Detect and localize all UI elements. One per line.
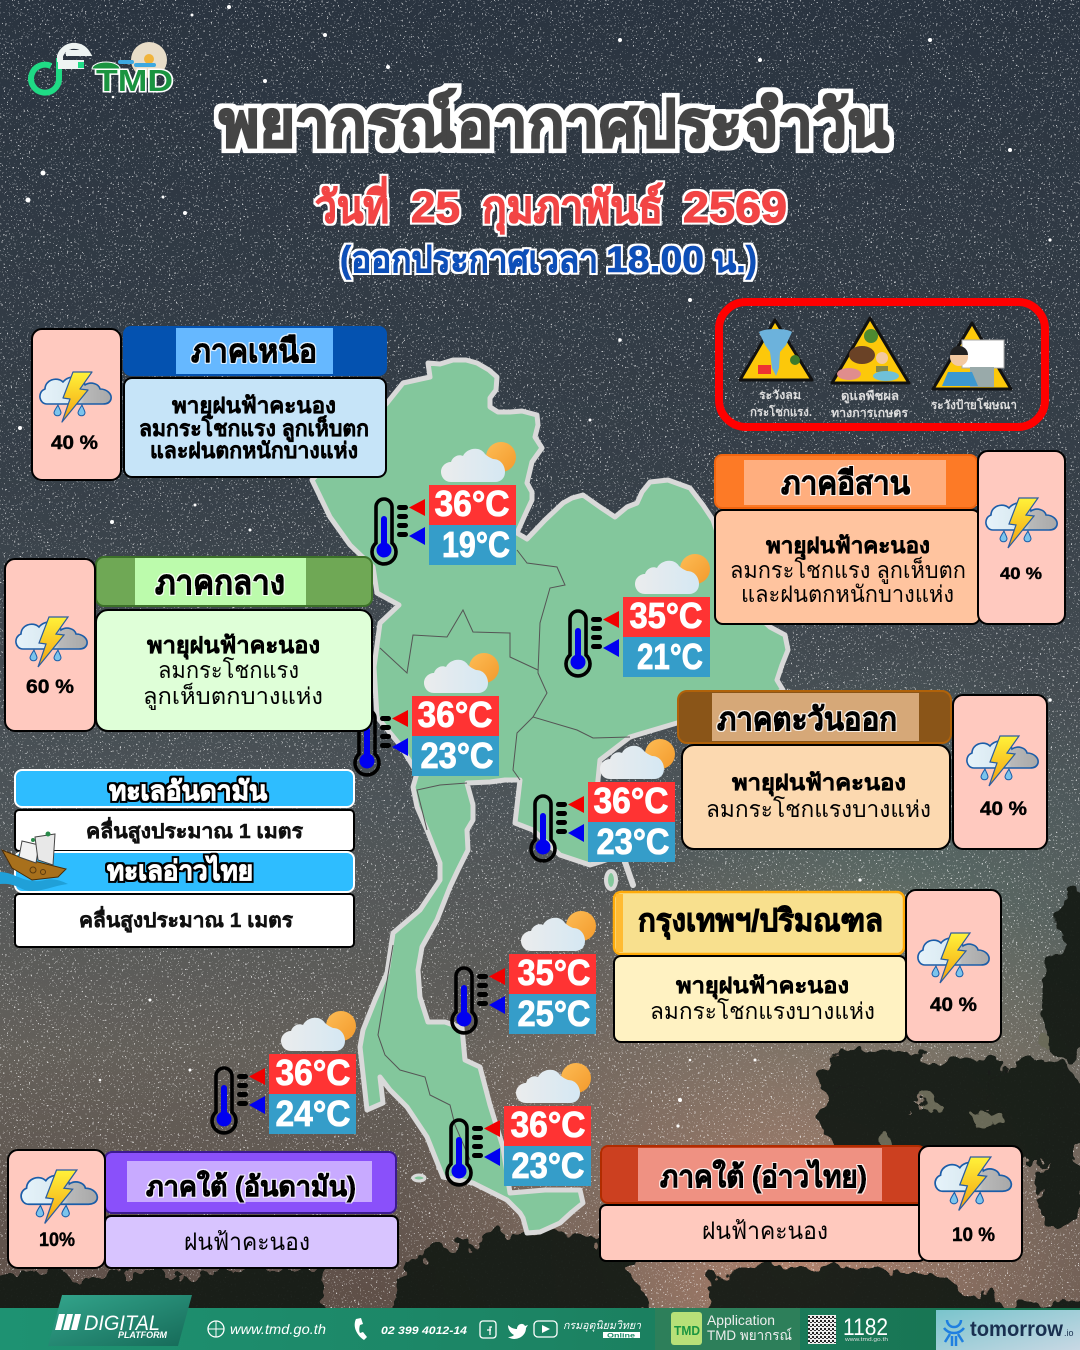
temperature: south andaman: 36°C [276,1052,351,1093]
panel: south gulf [600,1146,1022,1261]
phone [355,1318,467,1340]
panel: sea forecast [0,770,354,947]
panel: north: ลมกระโชกแรง ลูกเห็บตก [139,414,369,443]
panel: north: พายุฝนฟ้าคะนอง [172,393,336,420]
temperature: south andaman: 24°C [276,1093,351,1134]
tomorrow.io logo [936,1310,1080,1350]
panel: Bangkok [614,890,1001,1042]
panel: south gulf: 10 % [952,1225,995,1246]
panel: north: และฝนตกหนักบางแห่ง [150,438,358,463]
temperature: northeast: 21°C [637,636,703,677]
temperature: north [372,442,516,565]
temperature: east: 23°C [596,821,670,862]
panel: Bangkok: 40 % [930,995,977,1016]
temperature: north: 19°C [442,524,510,565]
panel: sea forecast: คลื่นสูงประมาณ 1 เมตร [79,905,293,934]
panel: north: 40 % [51,433,98,454]
digital platform logo: DIGITAL [84,1312,160,1335]
panel: east: ภาคตะวันออก [717,701,897,737]
panel: northeast: ลมกระโชกแรง ลูกเห็บตก [730,555,966,584]
warning frame [719,302,1045,427]
department name: Online [607,1334,636,1340]
panel: sea forecast: คลื่นสูงประมาณ 1 เมตร [86,816,303,845]
temperature: northeast [566,554,710,677]
issue time: (ออกประกาศเวลา [340,239,598,280]
phone: 02 399 4012-14 [381,1325,467,1337]
temperature: south gulf: 36°C [510,1104,586,1145]
panel: south andaman: 10% [39,1230,75,1251]
icon: tornado warning: กระโชกแรง. [750,404,812,419]
date heading [315,176,787,235]
icon: billboard warning: ระวังป้ายโฆษณา [931,397,1017,412]
temperature: east [531,739,675,862]
application promo: Application [707,1312,775,1328]
logo: DE and TMD [31,42,173,98]
date heading: วันที่ [315,176,389,232]
panel: east: ลมกระโชกแรงบางแห่ง [706,796,931,822]
icon: tornado warning: ระวังลม [759,388,801,402]
panel: south andaman [8,1150,398,1268]
panel: south gulf: ภาคใต้ (อ่าวไทย) [660,1159,867,1194]
QR code [808,1315,836,1344]
temperature: Bangkok: 25°C [518,993,591,1034]
panel: south andaman: ภาคใต้ (อันดามัน) [146,1170,356,1202]
icon: farm warning [831,318,909,420]
panel: east [678,691,1047,849]
panel: central: พายุฝนฟ้าคะนอง [147,632,320,660]
panel: central: ภาคกลาง [155,564,285,602]
icon: ship [0,832,68,891]
panel: sea forecast: ทะเลอันดามัน [109,776,268,806]
issue time: น.) [713,239,757,280]
icon: farm warning: ดูแลพืชผล [841,389,899,404]
temperature: Bangkok: 35°C [518,952,591,993]
tomorrow.io logo: tomorrow [970,1318,1064,1341]
panel: south andaman: ฝนฟ้าคะนอง [184,1229,310,1256]
icon: billboard warning [931,323,1017,412]
panel: Bangkok: พายุฝนฟ้าคะนอง [676,973,849,1000]
hotline 1182: www.tmd.go.th [845,1337,888,1343]
application promo: TMD [674,1323,700,1338]
temperature: Bangkok [452,911,596,1034]
panel: northeast: และฝนตกหนักบางแห่ง [741,581,954,607]
temperature: north: 36°C [434,483,510,524]
panel: east: 40 % [980,799,1027,820]
title: พยากรณ์อากาศประจำวัน [219,88,889,160]
temperature: south andaman [212,1011,356,1134]
application promo: TMD พยากรณ์ [707,1327,792,1343]
panel: Bangkok: ลมกระโชกแรงบางแห่ง [650,998,875,1024]
temperature: south gulf [447,1063,591,1186]
panel: south gulf: ฝนฟ้าคะนอง [702,1218,828,1245]
panel: northeast [715,451,1065,624]
panel: central [5,557,372,731]
hotline 1182: 1182 [843,1314,888,1341]
date heading: 2569 [683,183,787,232]
logo: DE and TMD: TMD [96,63,173,98]
temperature: northeast: 35°C [630,595,703,636]
digital platform logo [48,1295,192,1346]
footer bar [0,1295,1080,1350]
issue time: 18.00 [606,239,704,280]
panel: northeast: 40 % [1000,564,1042,583]
background: tree silhouettes [0,889,1080,1330]
panel: north [32,326,387,480]
date heading: 25 [411,183,460,232]
department name [563,1320,642,1340]
panel: east: พายุฝนฟ้าคะนอง [732,770,906,797]
temperature: central [355,653,499,776]
map of Thailand [312,360,788,1233]
temperature: south gulf: 23°C [512,1145,585,1186]
temperature: central: 23°C [420,735,494,776]
website: www.tmd.go.th [230,1321,326,1337]
icon: tornado warning [740,320,812,419]
panel: central: ลมกระโชกแรง [158,657,299,683]
social icons [480,1321,557,1339]
panel: northeast: ภาคอีสาน [781,465,910,501]
application promo [655,1308,800,1350]
panel: northeast: พายุฝนฟ้าคะนอง [766,533,930,560]
temperature: east: 36°C [594,780,669,821]
issue time [340,239,757,280]
temperature: central: 36°C [418,694,493,735]
panel: north: ภาคเหนือ [191,333,317,369]
panel: sea forecast: ทะเลอ่าวไทย [107,855,253,886]
tomorrow.io logo: .io [1064,1328,1074,1338]
panel: Bangkok: กรุงเทพฯ/ปริมณฑล [638,903,883,940]
digital platform logo: PLATFORM [118,1330,167,1340]
department name: กรมอุตุนิยมวิทยา [563,1320,642,1332]
panel: central: ลูกเห็บตกบางแห่ง [143,681,323,710]
icon: farm warning: ทางการเกษตร [831,406,909,420]
panel: central: 60 % [26,677,74,698]
date heading: กุมภาพันธ์ [482,182,663,235]
